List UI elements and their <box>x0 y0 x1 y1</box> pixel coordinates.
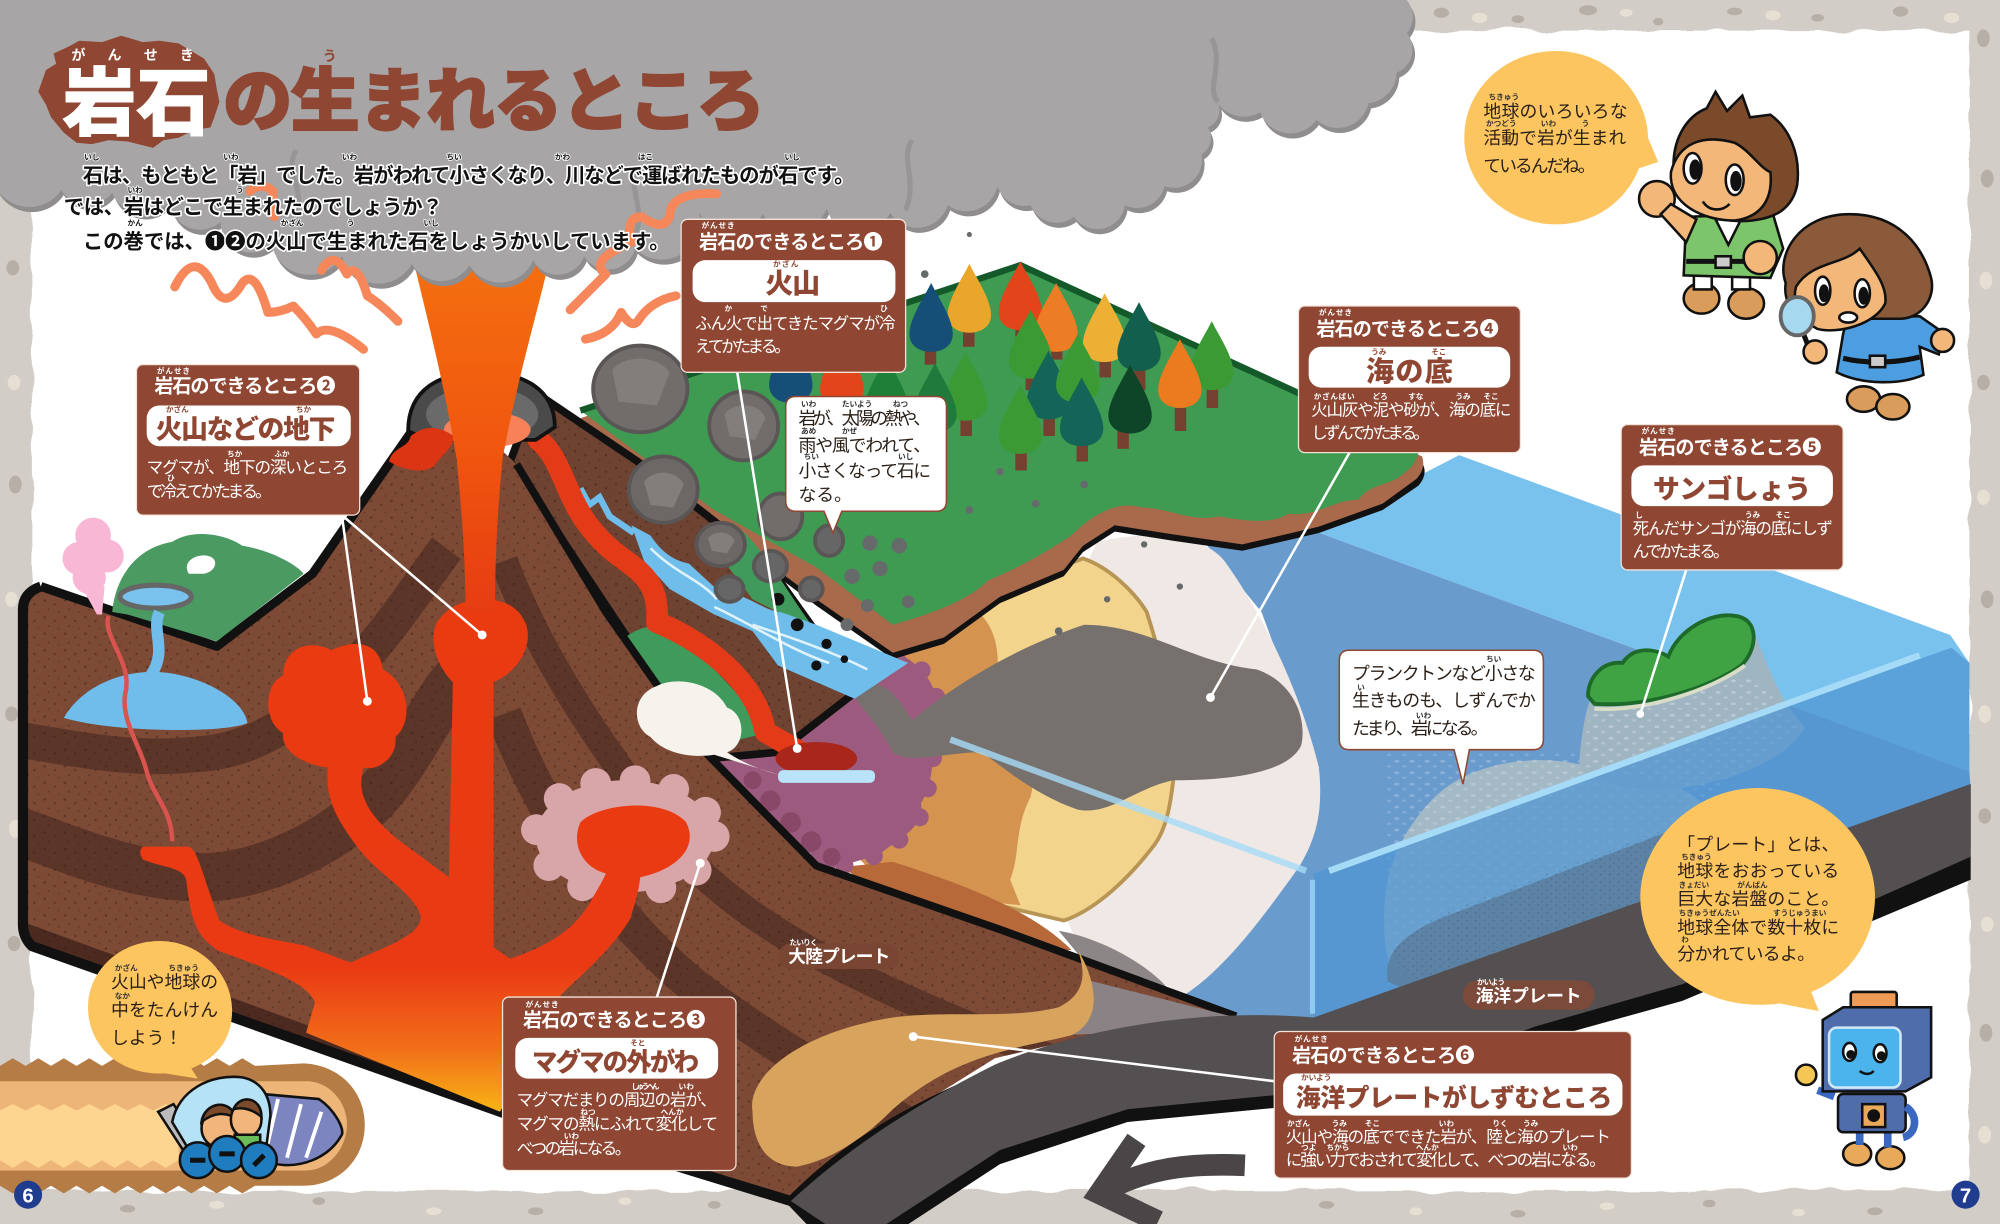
callout: plankton: たまり、岩になる。 <box>1352 718 1489 738</box>
leader lines <box>342 372 1686 1081</box>
front pane <box>1314 648 1969 1023</box>
panel: 岩石のできるところ4 海の底: そこ <box>1431 347 1446 356</box>
panel: 岩石のできるところ3 マグマの外がわ: いわ <box>564 1132 579 1141</box>
panel: 岩石のできるところ6 海洋プレートがしずむところ: 火山や海の底でできた岩が、陸と海のプレート <box>1286 1127 1611 1146</box>
intro text: ちい <box>446 152 462 161</box>
panel: 岩石のできるところ4 海の底: うみ <box>1455 392 1471 401</box>
callout: rocks broken by weather: ちい <box>804 452 819 461</box>
speech bubble: what is a plate: 地球全体で数十枚に <box>1677 917 1839 937</box>
intro text: う <box>347 219 355 228</box>
panel: 岩石のできるところ5 サンゴしょう: 岩石のできるところ❺ <box>1639 437 1821 459</box>
panel: 岩石のできるところ4 海の底: 海の底 <box>1366 356 1453 387</box>
panel: 岩石のできるところ6 海洋プレートがしずむところ: 海洋プレートがしずむところ <box>1296 1084 1612 1113</box>
tan slab on plate <box>752 950 1094 1167</box>
panel: 岩石のできるところ6 海洋プレートがしずむところ: へんか <box>1416 1143 1439 1152</box>
intro text: この巻では、❶❷の火山で生まれた石をしょうかいしています。 <box>83 231 670 254</box>
title: の生まれるところ <box>223 63 765 140</box>
panel: 岩石のできるところ2 火山などの地下: がんせき <box>157 366 190 376</box>
speech bubble: earth activity: ているんだね。 <box>1483 156 1596 176</box>
callout: rocks broken by weather: かぜ <box>842 427 857 435</box>
callout: rocks broken by weather: なる。 <box>798 485 852 505</box>
panel: 岩石のできるところ2 火山などの地下: ひ <box>167 474 175 483</box>
smoke cloud <box>0 0 1415 289</box>
panel: 岩石のできるところ4 海の底: かざんばい <box>1314 391 1355 401</box>
magma eruption column <box>415 254 551 612</box>
intro text <box>64 152 855 254</box>
speech bubble: what is a plate <box>1640 788 1875 1011</box>
panel: 岩石のできるところ5 サンゴしょう: そこ <box>1776 511 1791 520</box>
title: がんせき <box>71 47 194 63</box>
magma halo <box>536 780 714 892</box>
panel: 岩石のできるところ3 マグマの外がわ: そと <box>630 1039 645 1047</box>
panel: 岩石のできるところ4 海の底: しずんでかたまる。 <box>1311 424 1430 443</box>
intro text: いし <box>784 152 800 161</box>
panel: 岩石のできるところ3 マグマの外がわ <box>503 997 736 1170</box>
volcanic crater <box>389 372 555 470</box>
speech bubble: earth activity: ちきゅう <box>1489 92 1519 101</box>
intro text: いわ <box>223 152 239 161</box>
panel: 岩石のできるところ6 海洋プレートがしずむところ: そこ <box>1365 1119 1380 1128</box>
callout: rocks broken by weather: 小さくなって石に <box>798 461 931 481</box>
panel: 岩石のできるところ5 サンゴしょう: うみ <box>1745 511 1761 520</box>
panel: 岩石のできるところ6 海洋プレートがしずむところ: りく <box>1492 1119 1508 1128</box>
label: continental plate: 大陸プレート <box>788 947 890 967</box>
panel: 岩石のできるところ1 火山: ふん火で出てきたマグマが冷 <box>695 314 896 333</box>
speech bubble: earth activity <box>1464 51 1658 224</box>
pink steam plume <box>62 518 124 615</box>
panel: 岩石のできるところ6 海洋プレートがしずむところ: うみ <box>1523 1119 1539 1128</box>
panel: 岩石のできるところ3 マグマの外がわ: しゅうへん <box>631 1082 660 1091</box>
callout: plankton: プランクトンなど小さな <box>1352 664 1536 684</box>
panel: 岩石のできるところ4 海の底: がんせき <box>1319 307 1352 317</box>
panel: 岩石のできるところ6 海洋プレートがしずむところ: かざん <box>1287 1118 1310 1128</box>
volcano back slope with river and lava <box>510 346 908 775</box>
subducting oceanic plate <box>784 784 1971 1224</box>
speech bubble: what is a plate: すうじゅうまい <box>1773 908 1827 917</box>
panel: 岩石のできるところ6 海洋プレートがしずむところ: がんせき <box>1295 1034 1328 1044</box>
label: oceanic plate: 海洋プレート <box>1476 986 1582 1006</box>
panel: 岩石のできるところ1 火山: ひ <box>880 304 888 313</box>
character: girl <box>1781 214 1954 419</box>
speech bubble: what is a plate: わ <box>1681 935 1689 944</box>
seismic wave marks <box>175 186 717 349</box>
forested land <box>580 232 1425 659</box>
grey volcanic ash deposit <box>848 625 1303 811</box>
green bank <box>625 626 765 746</box>
panel: 岩石のできるところ6 海洋プレートがしずむところ: うみ <box>1332 1119 1347 1128</box>
intro text: かん <box>128 219 143 228</box>
callout: plankton: い <box>1357 683 1365 692</box>
lava flow <box>538 440 814 760</box>
speech bubble: earth activity: いわ <box>1541 119 1556 128</box>
panel: 岩石のできるところ2 火山などの地下: ちか <box>227 449 243 458</box>
outline <box>23 586 867 1224</box>
panel: 岩石のできるところ2 火山などの地下: かざん <box>166 404 189 414</box>
panel: 岩石のできるところ5 サンゴしょう: んでかたまる。 <box>1633 542 1730 561</box>
title <box>38 36 765 148</box>
panel: 岩石のできるところ4 海の底: うみ <box>1371 347 1387 356</box>
speech bubble: what is a plate: 「プレート」とは、 <box>1677 834 1839 854</box>
panel: 岩石のできるところ2 火山などの地下: 岩石のできるところ❷ <box>154 376 335 398</box>
sea box <box>1185 455 1971 1023</box>
drill vehicle <box>158 1077 342 1178</box>
trees <box>769 261 1233 470</box>
panel: 岩石のできるところ1 火山: か <box>724 304 732 313</box>
speech bubble: earth activity: 地球のいろいろな <box>1483 101 1628 121</box>
speech bubble: explore: ちきゅう <box>168 963 199 972</box>
orange mud layer <box>842 607 1032 905</box>
intro text: 石は、もともと「岩」でした。岩がわれて小さくなり、川などで運ばれたものが石です。 <box>83 163 855 187</box>
brown gravel layer <box>842 862 1071 954</box>
panel: 岩石のできるところ5 サンゴしょう: し <box>1635 511 1643 520</box>
intro text: いわ <box>128 186 143 195</box>
speech bubble: explore: なか <box>115 991 130 1000</box>
panel: 岩石のできるところ5 サンゴしょう: サンゴしょう <box>1653 474 1811 505</box>
panel: 岩石のできるところ3 マグマの外がわ: 岩石のできるところ❸ <box>523 1009 705 1031</box>
speech bubble: explore <box>88 941 232 1079</box>
magma chambers and conduits <box>140 599 690 1112</box>
volcano and continental plate cross-section <box>19 427 1244 1224</box>
page number 7 <box>1952 1181 1980 1209</box>
panel: 岩石のできるところ3 マグマの外がわ: ねつ <box>580 1107 596 1116</box>
page number 6 <box>14 1181 42 1209</box>
intro text: かざん <box>281 218 304 228</box>
panel: 岩石のできるところ2 火山などの地下: で冷えてかたまる。 <box>147 482 272 501</box>
title badge: rock <box>38 36 219 148</box>
white volcanic ash layer <box>995 536 1320 994</box>
callout: plankton: いわ <box>1416 711 1431 720</box>
panel: 岩石のできるところ6 海洋プレートがしずむところ: に強い力でおされて変化して、べつの岩になる。 <box>1286 1150 1606 1169</box>
grey wedge under the cut <box>1059 979 1282 1035</box>
speech bubble: what is a plate: 地球をおおっている <box>1677 861 1839 881</box>
speech bubble: what is a plate: きょだい <box>1679 880 1709 889</box>
intro text: いし <box>84 152 99 161</box>
panel: 岩石のできるところ5 サンゴしょう: がんせき <box>1642 426 1675 435</box>
panel: 岩石のできるところ4 海の底: 火山灰や泥や砂が、海の底に <box>1311 401 1511 420</box>
panel: 岩石のできるところ1 火山: えてかたまる。 <box>695 337 791 356</box>
callout: rocks broken by weather: たいよう <box>842 399 872 409</box>
underground water <box>64 672 247 730</box>
label: continental plate: たいりく <box>790 937 818 947</box>
panel: 岩石のできるところ2 火山などの地下: 火山などの地下 <box>156 415 335 445</box>
panel: 岩石のできるところ3 マグマの外がわ: マグマだまりの周辺の岩が、 <box>517 1090 717 1109</box>
callout: rocks broken by weather: 雨や風でわれて、 <box>798 435 931 455</box>
label: oceanic plate: かいよう <box>1477 977 1505 986</box>
speech bubble: explore: かざん <box>115 962 138 972</box>
coral island <box>1579 615 1805 790</box>
panel: 岩石のできるところ3 マグマの外がわ: マグマの外がわ <box>532 1048 699 1077</box>
plate movement arrow <box>1099 1140 1245 1221</box>
panel: 岩石のできるところ6 海洋プレートがしずむところ: いわ <box>1439 1119 1454 1128</box>
speech bubble: what is a plate: ちきゅう <box>1681 852 1712 861</box>
panel: 岩石のできるところ1 火山: 岩石のできるところ❶ <box>699 232 883 254</box>
panel: 岩石のできるところ6 海洋プレートがしずむところ: ちから <box>1327 1143 1349 1152</box>
panel: 岩石のできるところ3 マグマの外がわ: がんせき <box>526 999 559 1009</box>
geological layers in the cut <box>709 536 1320 1017</box>
magnifier <box>1804 334 1812 357</box>
speech bubble: what is a plate: ちきゅうぜんたい <box>1679 907 1740 917</box>
seabed mound <box>1384 760 1716 994</box>
boulders <box>593 346 843 602</box>
panel: 岩石のできるところ6 海洋プレートがしずむところ: かいよう <box>1301 1073 1331 1082</box>
callout: rocks broken by weather: ねつ <box>893 400 909 409</box>
steam cloud and puddle at lava edge <box>637 681 875 783</box>
panel: 岩石のできるところ6 海洋プレートがしずむところ <box>1274 1031 1631 1178</box>
callout: rocks broken by weather: いし <box>898 452 913 461</box>
intro text: では、岩はどこで生まれたのでしょうか？ <box>64 196 443 219</box>
intro text: いし <box>423 219 439 228</box>
panel: 岩石のできるところ6 海洋プレートがしずむところ: いわ <box>1562 1143 1578 1152</box>
character: robot guide <box>1796 992 1931 1169</box>
panel: 岩石のできるところ4 海の底: 岩石のできるところ❹ <box>1316 318 1499 340</box>
speech bubble: explore: 火山や地球の <box>111 972 218 992</box>
speech bubble: earth activity: かつどう <box>1486 118 1517 128</box>
callout: plankton <box>1339 650 1543 784</box>
panel: 岩石のできるところ3 マグマの外がわ: いわ <box>679 1082 694 1091</box>
panel: 岩石のできるところ1 火山: 火山 <box>765 268 820 299</box>
speech bubble: earth activity: う <box>1582 119 1589 128</box>
exploration tunnel with drill vehicle <box>0 1058 365 1193</box>
panel: 岩石のできるところ4 海の底: すな <box>1408 392 1424 401</box>
panel: 岩石のできるところ1 火山: かざん <box>773 258 799 268</box>
intro text: はこ <box>638 152 653 161</box>
panel: 岩石のできるところ3 マグマの外がわ: へんか <box>661 1107 684 1116</box>
panel: 岩石のできるところ4 海の底 <box>1298 306 1520 453</box>
speech bubble: earth activity: 活動で岩が生まれ <box>1483 128 1626 148</box>
panel: 岩石のできるところ1 火山: で <box>760 304 768 313</box>
panel: 岩石のできるところ1 火山 <box>681 219 906 372</box>
intro text: かわ <box>555 152 570 161</box>
panel: 岩石のできるところ6 海洋プレートがしずむところ: 岩石のできるところ❻ <box>1292 1045 1474 1067</box>
page number 7: 7 <box>1960 1185 1971 1207</box>
panel: 岩石のできるところ1 火山: がんせき <box>702 220 735 230</box>
scattered stones <box>841 232 1183 635</box>
panel: 岩石のできるところ2 火山などの地下 <box>136 365 360 515</box>
callout: rocks broken by weather: いわ <box>801 400 817 409</box>
panel: 岩石のできるところ6 海洋プレートがしずむところ: つよ <box>1301 1143 1316 1152</box>
speech bubble: what is a plate: 分かれているよ。 <box>1677 944 1815 964</box>
label: continental plate <box>778 937 899 969</box>
speech bubble: what is a plate: がんばん <box>1737 879 1768 889</box>
page number 6: 6 <box>22 1185 34 1207</box>
title: う <box>323 48 337 64</box>
glass edge line over layers <box>950 740 1306 871</box>
panel: 岩石のできるところ5 サンゴしょう <box>1621 425 1843 570</box>
callout: plankton: ちい <box>1486 655 1502 664</box>
glass edge lines <box>1329 655 1920 871</box>
panel: 岩石のできるところ2 火山などの地下: ふか <box>274 449 290 458</box>
speech bubble: explore: しよう！ <box>111 1028 182 1048</box>
panel: 岩石のできるところ5 サンゴしょう: 死んだサンゴが海の底にしず <box>1633 518 1833 538</box>
panel: 岩石のできるところ3 マグマの外がわ: マグマの熱にふれて変化して <box>517 1115 718 1134</box>
strata <box>19 548 1084 1148</box>
label: oceanic plate <box>1463 977 1594 1010</box>
intro text: いわ <box>342 152 357 161</box>
callout: rocks broken by weather: 岩が、太陽の熱や、 <box>798 409 931 429</box>
speech bubble: explore: 中をたんけん <box>111 1000 218 1020</box>
callout: rocks broken by weather: あめ <box>801 427 817 435</box>
intro text: う <box>236 186 244 195</box>
panel: 岩石のできるところ3 マグマの外がわ: べつの岩になる。 <box>517 1139 631 1158</box>
purple lava rock layer <box>709 650 938 870</box>
callout: plankton: 生きものも、しずんでか <box>1352 690 1536 710</box>
speech bubble: what is a plate: 巨大な岩盤のこと。 <box>1677 889 1839 909</box>
panel: 岩石のできるところ4 海の底: そこ <box>1483 392 1499 401</box>
title: 岩石 <box>62 62 210 145</box>
panel: 岩石のできるところ4 海の底: どろ <box>1372 391 1388 401</box>
panel: 岩石のできるところ2 火山などの地下: ちか <box>296 405 312 414</box>
character: boy <box>1639 92 1798 319</box>
yellow sand layer <box>944 558 1175 921</box>
river <box>580 488 634 533</box>
panel: 岩石のできるところ2 火山などの地下: マグマが、地下の深いところ <box>147 458 348 477</box>
left surface with hot spring <box>62 518 304 641</box>
callout: rocks broken by weather <box>786 397 946 533</box>
